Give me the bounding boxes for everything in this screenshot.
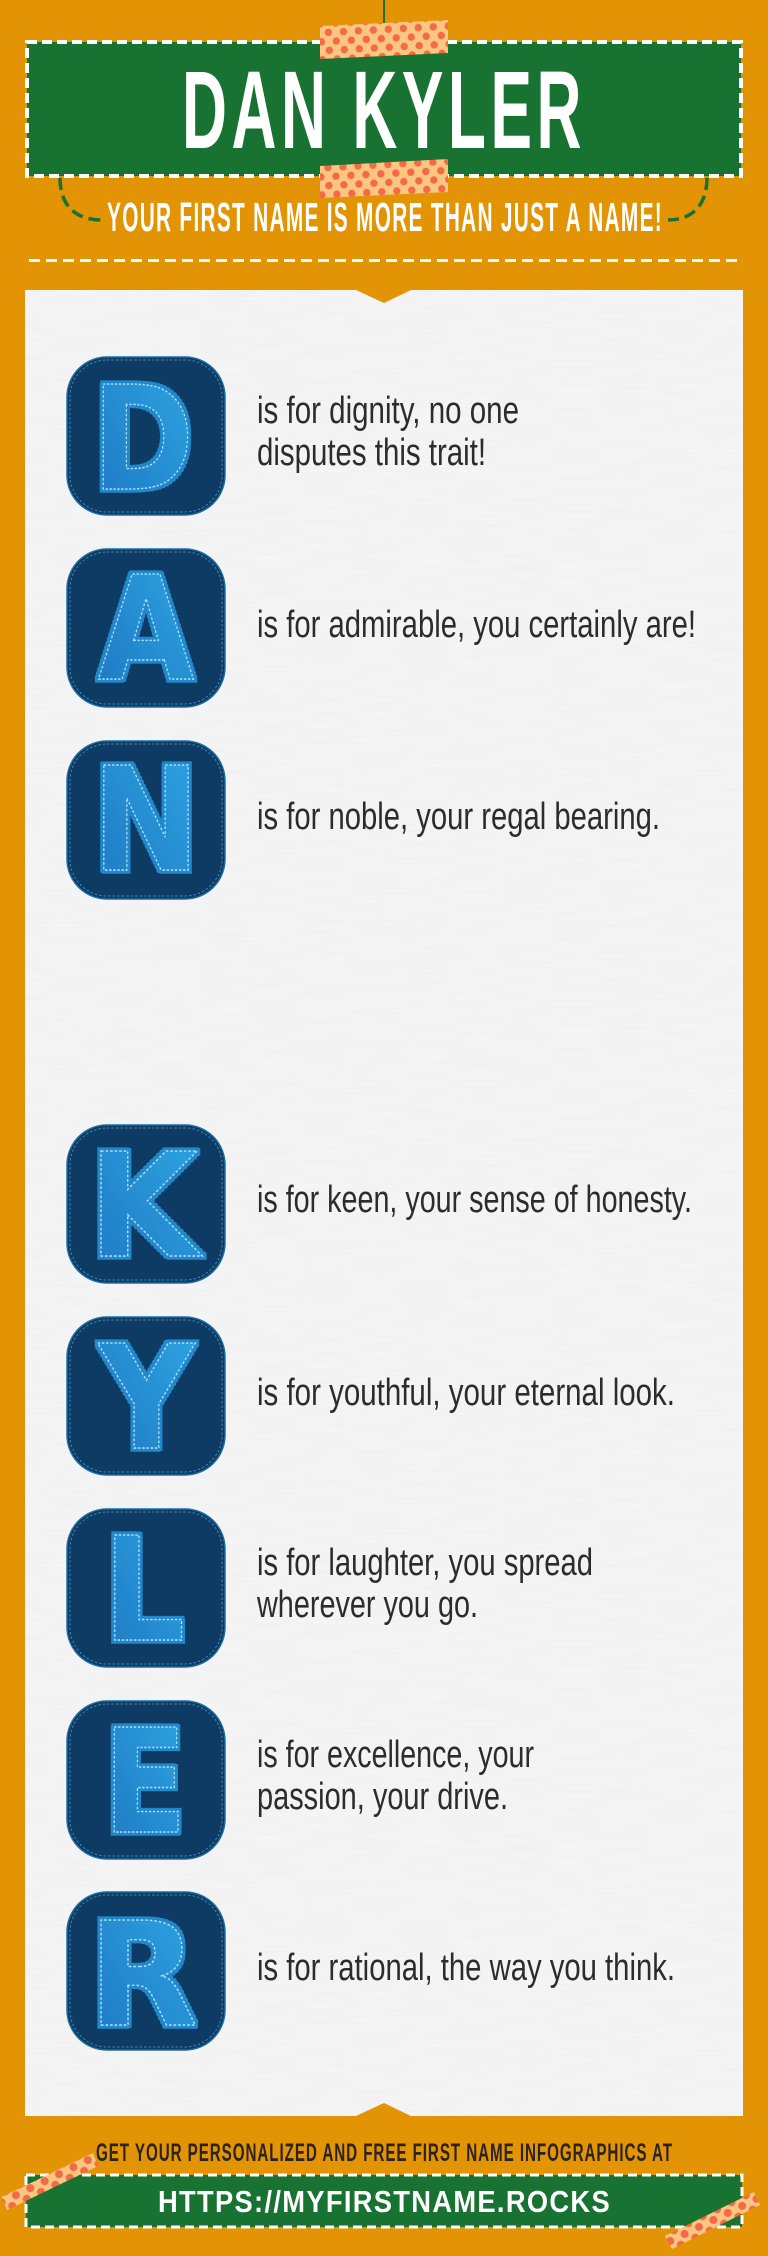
text: E: is for excellence, your [257,1734,534,1776]
tape: right [665,2192,760,2249]
text: D [257,390,519,474]
connector: left [60,178,102,220]
icon: letter L [67,1506,225,1674]
main panel [25,290,743,2116]
text: L: is for laughter, you spread [257,1542,593,1584]
tape: top [320,20,448,59]
tape: left [2,2153,98,2210]
row: N [67,736,660,904]
icon: letter Y: Y [97,1314,196,1482]
text: D: is for dignity, no one [257,390,519,432]
icon: letter D: D [92,355,194,523]
panel background [25,290,743,2116]
connector: right [668,178,707,220]
header banner [27,0,741,198]
icon: letter L: L [103,1506,185,1674]
top notch [356,290,411,303]
row: R [67,1891,675,2059]
footer banner [2,2153,760,2249]
icon: letter E: E [103,1698,187,1866]
icon: letter R: R [88,1891,198,2059]
row: A [67,545,696,713]
text: D: disputes this trait! [257,432,486,474]
icon: letter E [67,1698,225,1866]
text: N: is for noble, your regal bearing. [257,796,660,838]
icon: letter K: K [88,1122,202,1290]
text: E: passion, your drive. [257,1776,508,1818]
green URL panel [26,2175,742,2227]
icon: letter N: N [92,736,200,904]
row: L [67,1506,593,1674]
text: L: wherever you go. [256,1584,478,1626]
URL: HTTPS://MYFIRSTNAME.ROCKS [158,2184,611,2219]
text: E [257,1734,534,1818]
paper texture [25,290,743,2116]
text: L [256,1542,593,1626]
bottom notch [356,2103,411,2116]
row: E [67,1698,534,1866]
row: Y [67,1314,675,1482]
hanging string [383,0,385,26]
icon: letter A: A [98,545,194,713]
icon: letter Y [67,1314,225,1482]
row: K [67,1122,692,1290]
tape: bottom [320,159,448,198]
row: D [67,355,519,523]
dashed divider [29,259,738,262]
tagline with curved connectors [60,178,707,240]
green title panel [27,42,741,176]
